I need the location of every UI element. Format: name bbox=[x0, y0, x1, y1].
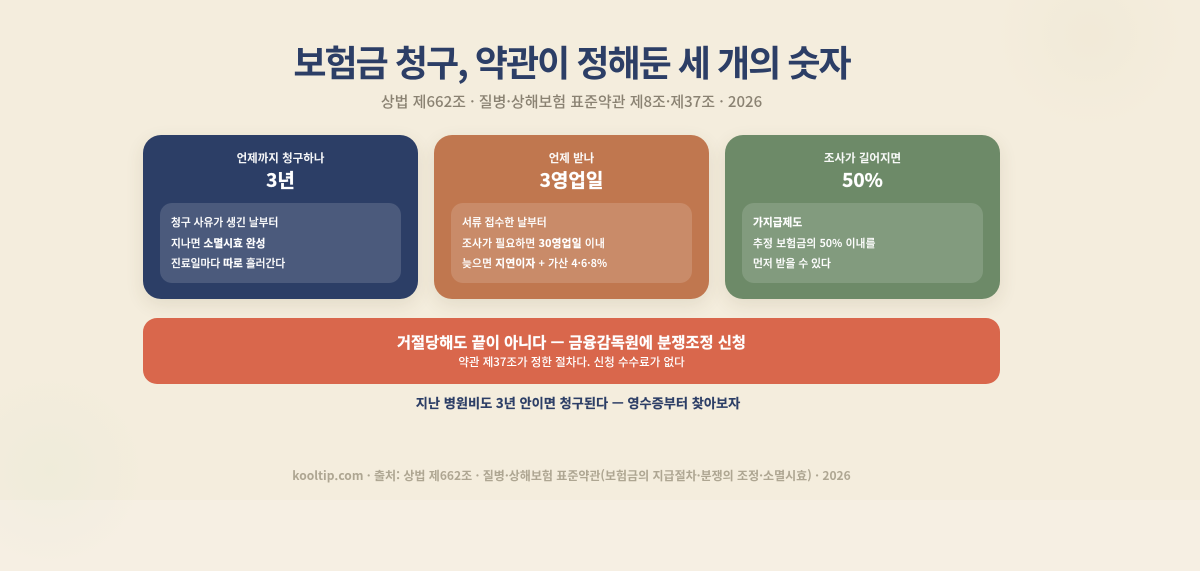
background glow: top right bbox=[995, 0, 1185, 130]
card label: 언제 받나 bbox=[549, 150, 594, 166]
source footer: kooltip.com · 출처: 상법 제662조 · 질병·상해보험 표준약관(보험금의 지급절차·분쟁의 조정·소멸시효) · 2026 bbox=[292, 467, 851, 484]
detail box bbox=[742, 203, 983, 283]
subtitle: 상법 제662조 · 질병·상해보험 표준약관 제8조·제37조 · 2026 bbox=[381, 91, 762, 112]
card label: 언제까지 청구하나 bbox=[237, 150, 324, 166]
card label: 조사가 길어지면 bbox=[824, 150, 901, 166]
key number: 3영업일 bbox=[540, 166, 603, 193]
detail box: 조사가 필요하면 30영업일 이내 bbox=[462, 236, 605, 251]
detail box: 서류 접수한 날부터 bbox=[462, 215, 547, 230]
panel: claim deadline bbox=[143, 135, 418, 299]
callout: dispute mediation bbox=[143, 318, 1000, 384]
callout text: 약관 제37조가 정한 절차다. 신청 수수료가 없다 bbox=[458, 354, 685, 370]
title: 보험금 청구, 약관이 정해둔 세 개의 숫자 bbox=[293, 35, 850, 87]
bottom band bbox=[0, 500, 1200, 571]
panel: advance payment bbox=[725, 135, 1000, 299]
callout heading: 거절당해도 끝이 아니다 — 금융감독원에 분쟁조정 신청 bbox=[397, 331, 746, 353]
detail box: 늦으면 지연이자 + 가산 4·6·8% bbox=[462, 256, 607, 271]
background glow: bottom left bbox=[0, 370, 150, 570]
key number: 3년 bbox=[266, 166, 295, 193]
detail box bbox=[160, 203, 401, 283]
detail box: 지나면 소멸시효 완성 bbox=[171, 236, 266, 251]
detail box bbox=[451, 203, 692, 283]
detail box: 진료일마다 따로 흘러간다 bbox=[171, 256, 285, 271]
closing message: 지난 병원비도 3년 안이면 청구된다 — 영수증부터 찾아보자 bbox=[416, 393, 740, 412]
key number: 50% bbox=[842, 166, 883, 193]
panel: payment deadline bbox=[434, 135, 709, 299]
detail box: 먼저 받을 수 있다 bbox=[753, 256, 831, 271]
detail box: 추정 보험금의 50% 이내를 bbox=[753, 236, 876, 251]
detail box: 가지급제도 bbox=[753, 215, 802, 230]
detail box: 청구 사유가 생긴 날부터 bbox=[171, 215, 278, 230]
